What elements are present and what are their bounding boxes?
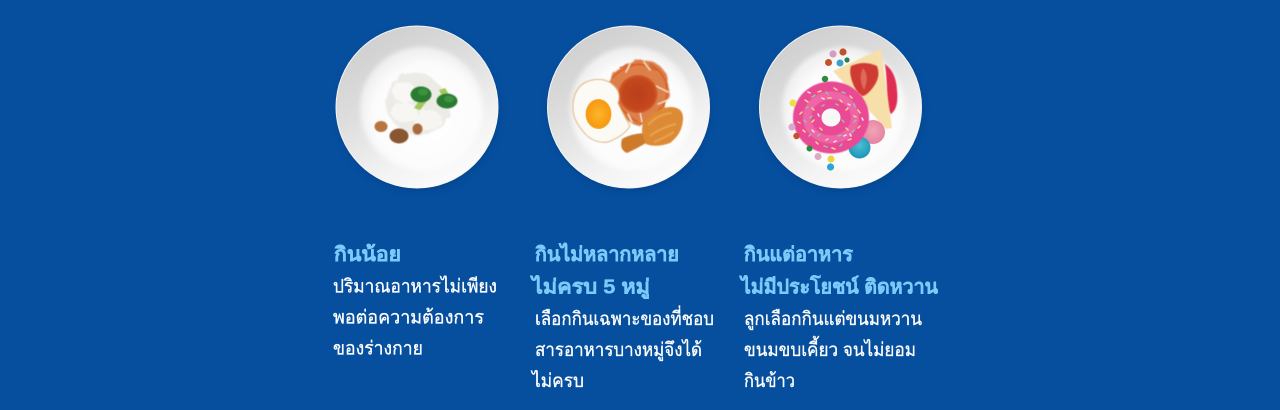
plate 3: donut, cheesecake and candy [760,26,922,191]
food: fried egg [573,79,630,142]
heading line 2: no benefit, sweet tooth: ไม่มีประโยชน์ ติดหวาน [739,274,938,298]
food: yolk [586,99,612,129]
description line 3: ของร่างกาย [333,338,423,360]
description line 3: ไม่ครบ [530,370,584,392]
text block: eating too little [333,243,497,360]
description line 1: ปริมาณอาหารไม่เพียง [333,276,497,298]
description line 2: ขนมขบเคี้ยว จนไม่ยอม [744,336,916,361]
description line 1: เลือกกินเฉพาะของที่ชอบ [535,305,714,330]
food: broccoli [410,86,458,110]
food: macarons [861,120,885,144]
text block: eating only unhealthy food [739,244,938,392]
food: nuts [374,121,422,144]
food: noodles [609,60,669,126]
plate 1: small portion of rice [336,26,499,191]
food: rice [386,72,451,136]
description line 3: กินข้าว [744,371,795,392]
food: pink donut [793,82,869,154]
food: candy pieces [788,48,850,171]
food: strawberry [850,63,878,96]
food: cheesecake slice [833,49,892,129]
heading line 2: not all 5 food groups: ไม่ครบ 5 หมู่ [530,274,650,300]
heading: eat too little: กินน้อย [334,243,401,266]
description line 2: สารอาหารบางหมู่จึงได้ [535,339,702,361]
description line 1: ลูกเลือกกินแต่ขนมหวาน [744,309,922,330]
food: sauce [618,75,658,113]
heading line 1: eating only food: กินแต่อาหาร [744,244,853,266]
plate 2: egg, noodles and fried chicken [548,26,710,191]
heading line 1: not varied: กินไม่หลากหลาย [535,242,679,266]
food: fried chicken [621,107,683,153]
description line 2: พอต่อความต้องการ [333,308,484,328]
food: berry sauce [885,64,897,114]
text block: not eating a variety [530,242,714,392]
